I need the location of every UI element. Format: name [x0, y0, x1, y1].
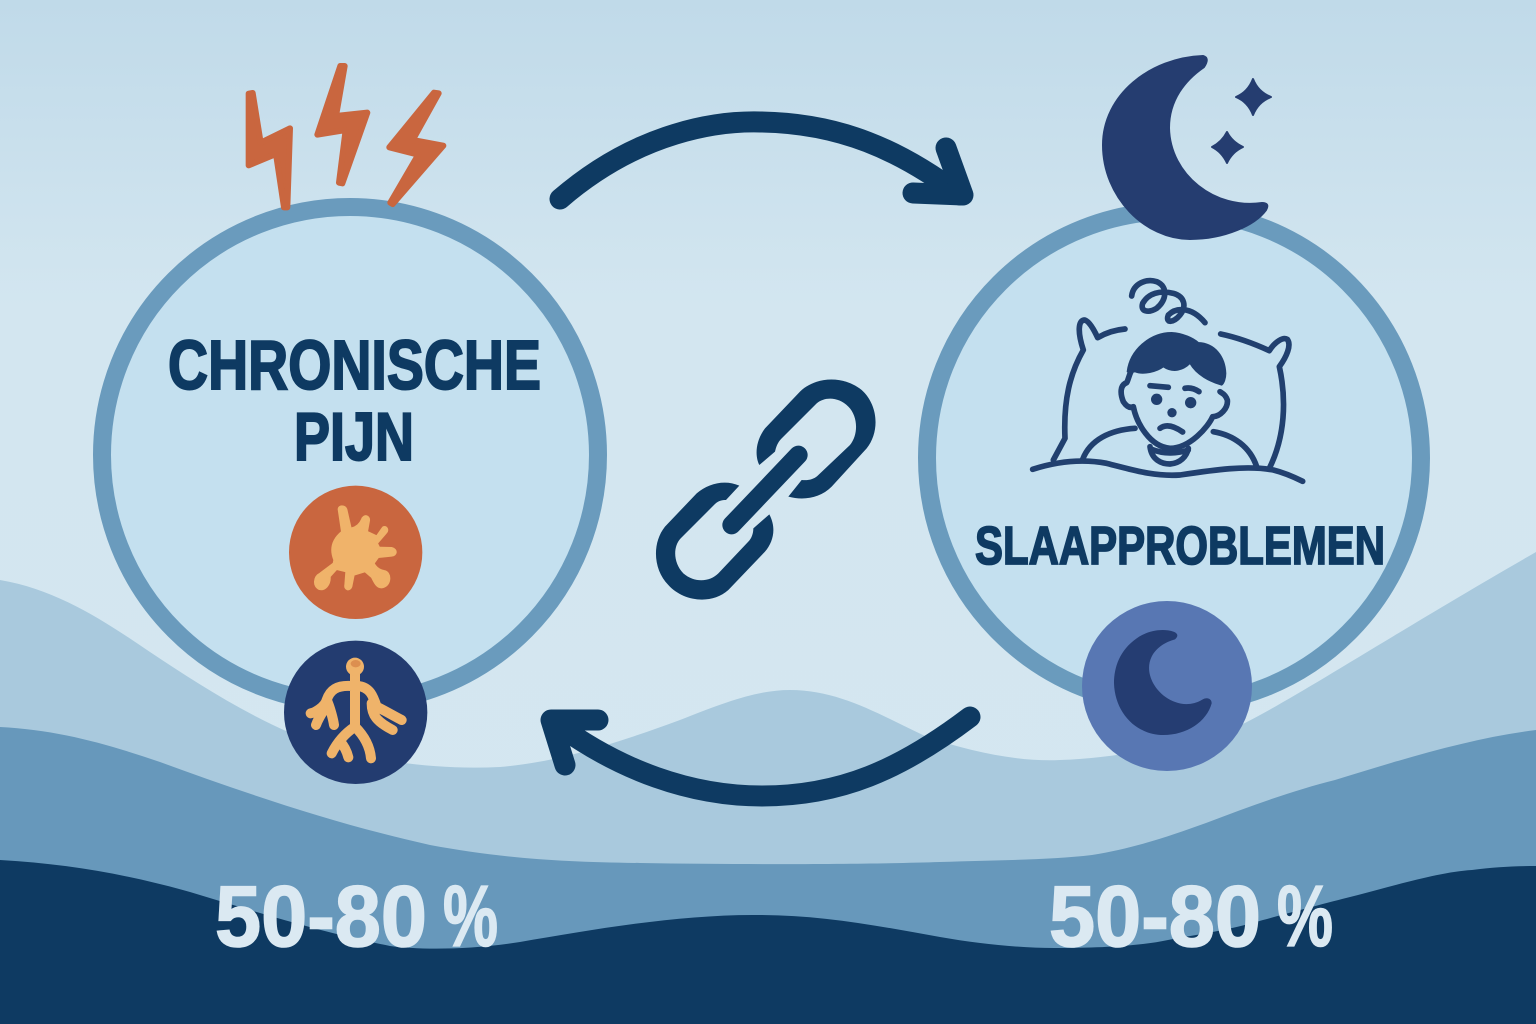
statistic: left percentage: %	[443, 869, 498, 965]
icon: lightning bolts	[249, 66, 443, 207]
heading: chronische pijn: PIJN	[294, 399, 414, 475]
panel: sleep problems circle	[927, 211, 1421, 705]
front dark wave	[0, 860, 1536, 1024]
heading: chronische pijn: CHRONISCHE	[168, 326, 541, 404]
icon: nerve badge	[284, 641, 427, 784]
icon: tired person in bed	[1033, 281, 1303, 481]
back hill wave	[0, 552, 1536, 1024]
statistic: right percentage: %	[1277, 869, 1333, 965]
middle wave	[0, 727, 1536, 1024]
panel: chronic pain circle	[102, 207, 598, 703]
icon: inflamed cell badge	[289, 486, 422, 619]
arrow: top clockwise	[560, 122, 963, 199]
heading: slaapproblemen: SLAAPPROBLEMEN	[975, 516, 1385, 576]
arrow: bottom clockwise	[551, 717, 970, 796]
icon: moon badge	[1082, 601, 1252, 771]
heading: chronische pijn	[168, 326, 541, 475]
statistic: left percentage: 50-80	[215, 869, 427, 965]
statistic: right percentage: 50-80	[1049, 869, 1261, 965]
icon: chain link	[656, 380, 876, 600]
icon: crescent moon with stars	[1103, 56, 1271, 239]
